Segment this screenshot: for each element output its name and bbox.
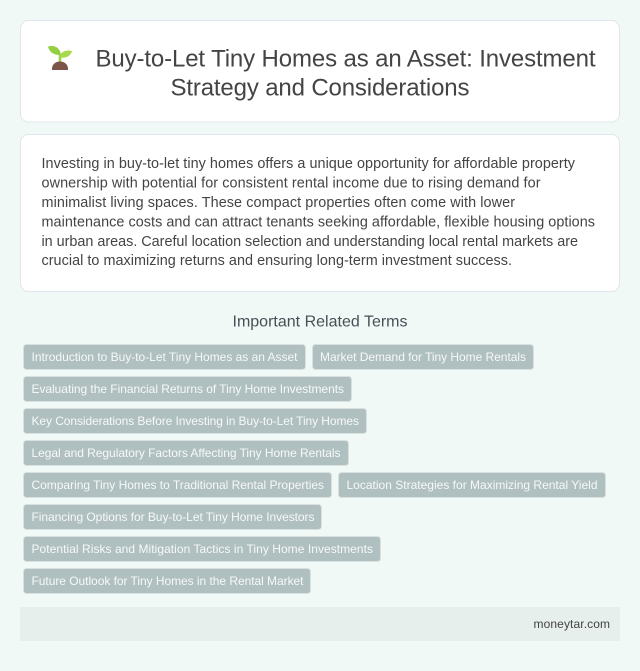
tag: legal and regulatory: Legal and Regulatory Factors Affecting Tiny Home Rentals: [32, 446, 340, 460]
text block: intro paragraph: minimalist living spaces. These compact properties often come with lower: [42, 195, 515, 211]
tag: comparing: [24, 472, 332, 498]
text block: intro paragraph: ownership with potential for consistent rental income due to rising demand for: [42, 176, 541, 192]
footer: [20, 607, 620, 641]
tag: location strategies: [338, 472, 606, 498]
panel: title header: [20, 20, 620, 122]
text block: intro paragraph: [42, 156, 595, 269]
panel: intro text: [20, 134, 620, 292]
tag: key considerations: Key Considerations Before Investing in Buy-to-Let Tiny Homes: [32, 414, 359, 428]
tag: introduction: Introduction to Buy-to-Let Tiny Homes as an Asset: [32, 350, 298, 364]
tag: market demand: Market Demand for Tiny Home Rentals: [320, 350, 526, 364]
tag: risks and mitigation: [24, 536, 380, 562]
tag: financial returns: [24, 376, 352, 402]
title: [96, 46, 596, 102]
tag: key considerations: [24, 408, 366, 434]
tag: financing options: [24, 504, 322, 530]
tag: financial returns: Evaluating the Financial Returns of Tiny Home Investments: [32, 382, 344, 396]
tag list: [24, 344, 606, 594]
tag: risks and mitigation: Potential Risks and Mitigation Tactics in Tiny Home Investments: [32, 542, 373, 556]
tag: introduction: [24, 344, 306, 370]
title: Strategy and Considerations: [170, 74, 470, 102]
text block: intro paragraph: crucial to maximizing returns and ensuring long-term investment success.: [42, 253, 512, 269]
heading: important related terms: Important Related Terms: [232, 314, 408, 330]
tag: legal and regulatory: [24, 440, 348, 466]
footer: moneytar.com: [534, 617, 610, 631]
text block: intro paragraph: maintenance costs and can attract tenants seeking affordable, flexible housing options: [42, 214, 595, 230]
tag: comparing: Comparing Tiny Homes to Traditional Rental Properties: [32, 478, 324, 492]
icon: sprout: [48, 46, 72, 70]
tag: future outlook: Future Outlook for Tiny Homes in the Rental Market: [32, 574, 304, 588]
tag: market demand: [312, 344, 534, 370]
tag: financing options: Financing Options for Buy-to-Let Tiny Home Investors: [32, 510, 314, 524]
text block: intro paragraph: Investing in buy-to-let tiny homes offers a unique opportunity for affordable property: [42, 156, 576, 172]
text block: intro paragraph: in urban areas. Careful location selection and understanding local rental markets are: [42, 234, 578, 250]
tag: location strategies: Location Strategies for Maximizing Rental Yield: [346, 478, 598, 492]
tag: future outlook: [24, 568, 310, 594]
title: Buy-to-Let Tiny Homes as an Asset: Investment: [96, 46, 596, 72]
